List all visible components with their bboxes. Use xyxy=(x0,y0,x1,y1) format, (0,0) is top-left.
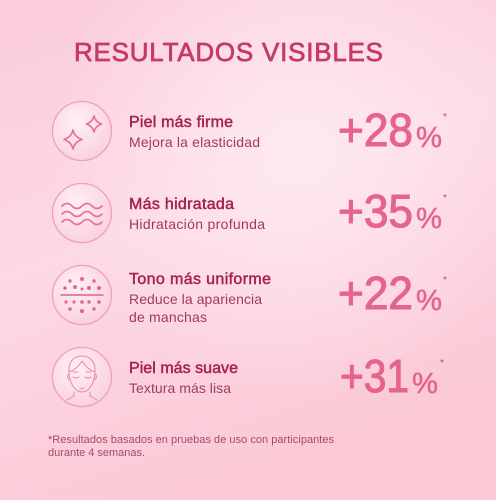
footnote: durante 4 semanas. xyxy=(48,447,145,459)
heading: tono más uniforme: Tono más uniforme xyxy=(129,271,271,288)
icon: face xyxy=(52,348,112,406)
stat: +35%: % xyxy=(416,203,442,235)
description: reduce la apariencia de manchas: Reduce la apariencia xyxy=(129,291,262,307)
row: tono más uniforme xyxy=(52,266,447,325)
stat: +22%: +22 xyxy=(338,267,413,319)
stat: +28%: % xyxy=(416,122,442,154)
row: piel más suave xyxy=(52,348,444,406)
description: mejora la elasticidad: Mejora la elasticidad xyxy=(129,134,260,150)
title: RESULTADOS VISIBLES xyxy=(74,37,383,67)
icon: sparkles xyxy=(52,102,112,160)
stat: +31%: +31 xyxy=(340,350,409,402)
stat: +31%: * xyxy=(440,358,444,369)
stat: +35%: +35 xyxy=(338,185,413,237)
heading: más hidratada: Más hidratada xyxy=(129,196,234,213)
row: más hidratada xyxy=(52,184,447,242)
description: textura más lisa: Textura más lisa xyxy=(129,380,231,396)
stat: +28%: +28 xyxy=(338,104,413,156)
row: piel más firme xyxy=(52,102,447,160)
heading: piel más suave: Piel más suave xyxy=(129,360,238,377)
icon: skin tone dots xyxy=(52,266,112,324)
stat: +22%: * xyxy=(443,275,447,286)
stat: +28%: * xyxy=(443,112,447,123)
icon: waves xyxy=(52,184,112,242)
footnote: *Resultados basados en pruebas de uso con participantes xyxy=(48,434,334,446)
heading: piel más firme: Piel más firme xyxy=(129,114,233,131)
stat: +35%: * xyxy=(443,193,447,204)
description: reduce la apariencia de manchas: de manchas xyxy=(129,309,207,325)
stat: +22%: % xyxy=(416,285,442,317)
stat: +31%: % xyxy=(412,368,438,400)
footnote xyxy=(48,434,334,459)
description: reduce la apariencia de manchas xyxy=(129,291,262,325)
description: hidratación profunda: Hidratación profunda xyxy=(129,216,265,232)
